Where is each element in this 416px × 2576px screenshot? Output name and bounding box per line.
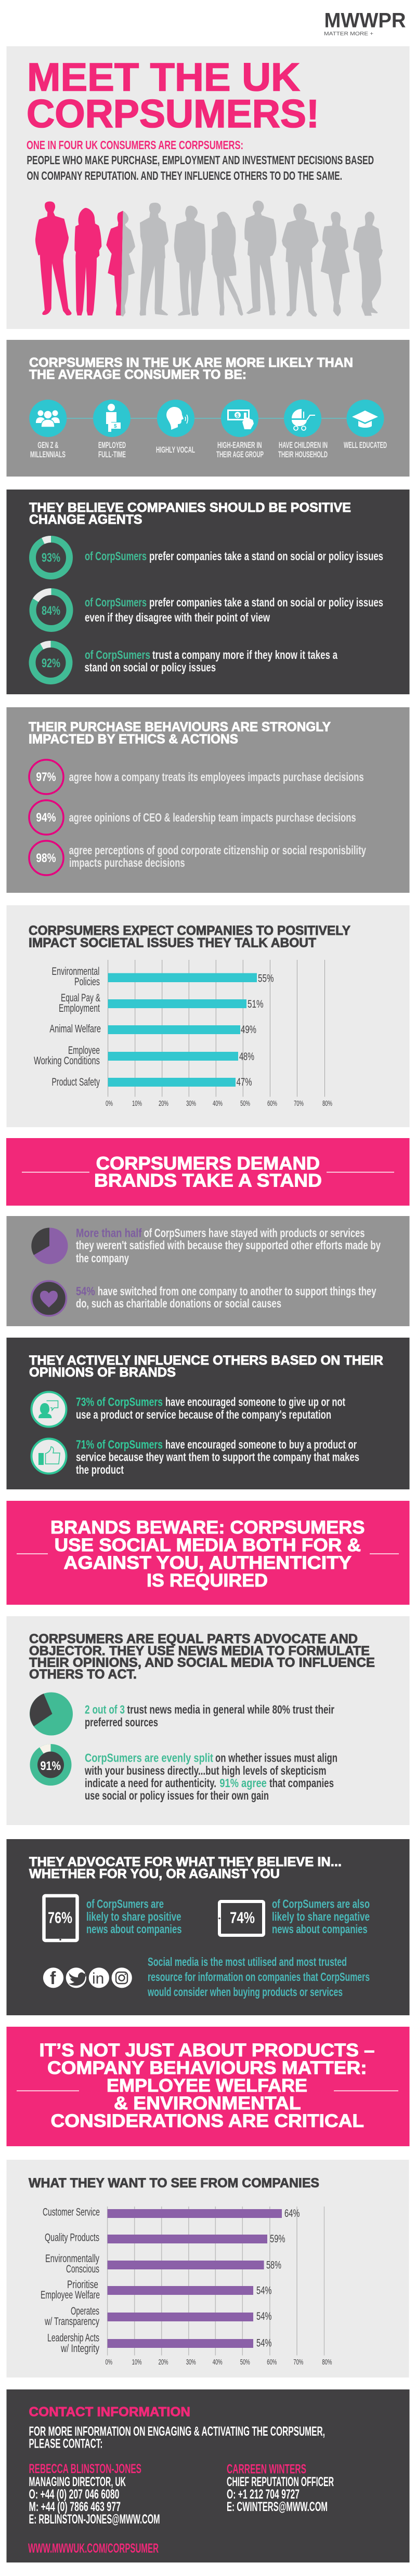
bar chart: company behaviours: Environmentally: [45, 2253, 99, 2265]
contact intro: PLEASE CONTACT:: [29, 2437, 103, 2451]
stat text: evenly split: CorpSumers are evenly split: [85, 1751, 213, 1765]
bar chart: issues: [34, 960, 332, 1108]
heading: CHANGE AGENTS: [29, 513, 142, 527]
stat text: 76%: of CorpSumers are: [86, 1897, 164, 1911]
banner: demand brands take a stand: BRANDS TAKE A STAND: [94, 1171, 322, 1191]
stat text: 74%: [272, 1897, 370, 1936]
panel: positive change agents: [6, 490, 410, 694]
bar chart: issues: 51%: [248, 998, 264, 1010]
bar chart: issues: Animal Welfare: [49, 1023, 101, 1035]
stat text: 92%: stand on social or policy issues: [84, 660, 216, 674]
stat text: 2 out of 3: [85, 1702, 334, 1729]
stat text: 74%: of CorpSumers are also: [272, 1897, 370, 1911]
hero intro text: [27, 138, 374, 182]
donut: 84%: 84%: [42, 604, 60, 618]
stat text: 76%: [86, 1897, 182, 1936]
banner: brands beware: AGAINST YOU, AUTHENTICITY: [63, 1553, 352, 1573]
banner: company behaviours matter: [6, 2027, 410, 2146]
icon labels: THEIR AGE GROUP: [216, 450, 264, 459]
donut: 91%: 91%: [41, 1759, 61, 1773]
bar chart: issues: 10%: [132, 1100, 142, 1108]
stat text: evenly split: use social or policy issues for their own gain: [85, 1789, 269, 1802]
bar chart: issues: Employment: [59, 1002, 100, 1014]
icon labels: GEN Z &: [37, 440, 58, 450]
stat text: 2 out of 3: trust news media in general while 80% trust their: [127, 1702, 334, 1716]
title: [27, 56, 319, 136]
stat text: 71%: [76, 1437, 359, 1476]
banner: demand brands take a stand: CORPSUMERS DEMAND: [96, 1154, 320, 1173]
heading: CORPSUMERS EXPECT COMPANIES TO POSITIVELY: [29, 924, 350, 938]
stat text: 76%: likely to share positive: [86, 1910, 181, 1923]
icon labels: HAVE CHILDREN IN: [279, 440, 328, 450]
stat text: 92%: [84, 648, 337, 674]
stat text: 73%: 73% of CorpSumers: [76, 1395, 163, 1408]
panel: advocate for what they believe: [6, 1839, 410, 2015]
stat text: 76%: news about companies: [86, 1922, 182, 1936]
icon labels: HIGH-EARNER IN: [217, 440, 262, 450]
banner: company behaviours matter: COMPANY BEHAVIOURS MATTER:: [47, 2058, 367, 2078]
heading: [29, 1354, 383, 1380]
icon: thumbs up: [31, 1438, 67, 1474]
icon labels: MILLENNIALS: [30, 450, 66, 459]
banner: company behaviours matter: IT’S NOT JUST ABOUT PRODUCTS –: [40, 2040, 374, 2060]
heading: THE AVERAGE CONSUMER TO BE:: [29, 368, 246, 382]
bar chart: company behaviours: 0%: [105, 2358, 112, 2367]
icon: landscape tablet 74%: [218, 1901, 264, 1935]
bar chart: issues: 47%: [237, 1076, 252, 1088]
icon: pram: [284, 400, 321, 437]
donut: 92%: 92%: [42, 656, 60, 670]
ring: 98%: [29, 841, 63, 875]
stat text: 73%: have encouraged someone to give up or not: [165, 1395, 345, 1408]
stat text: 74%: likely to share negative: [272, 1910, 370, 1923]
stat text: 54%: 54%: [76, 1285, 95, 1298]
banner: company behaviours matter: & ENVIRONMENTAL: [114, 2093, 301, 2113]
icon labels: HIGHLY VOCAL: [156, 445, 195, 455]
bar chart: company behaviours: [41, 2207, 332, 2367]
contact: Rebecca Blinston-Jones: [29, 2462, 160, 2527]
bar chart: issues: Employee: [68, 1045, 100, 1056]
heading: THEY ADVOCATE FOR WHAT THEY BELIEVE IN...: [29, 1855, 342, 1869]
icon: heart: [31, 1281, 67, 1316]
ring: 94%: [29, 800, 63, 835]
heading: [29, 1855, 342, 1881]
heading: THEIR OPINIONS, AND SOCIAL MEDIA TO INFLUENCE: [29, 1656, 375, 1670]
bar chart: company behaviours: Operates: [71, 2305, 99, 2317]
bar chart: issues: 49%: [241, 1024, 256, 1036]
heading: IMPACTED BY ETHICS & ACTIONS: [29, 733, 238, 746]
icon: portrait tablet 76%: [44, 1896, 77, 1940]
icons: social media: in: [92, 1970, 104, 1987]
stat text: 92%: trust a company more if they know it takes a: [152, 648, 337, 662]
heading: OTHERS TO ACT.: [29, 1668, 137, 1682]
heading: [29, 720, 331, 746]
logo: MWWPR: MATTER MORE +: [324, 31, 373, 37]
icons: social media: [43, 1967, 132, 1988]
panel: advocate and objector: [6, 1616, 410, 1825]
stat text: evenly split: that companies: [269, 1776, 334, 1790]
stat text: more than half: the company: [76, 1251, 129, 1265]
website: WWW.MWWUK.COM/CORPSUMER: [28, 2542, 159, 2556]
bar chart: company behaviours: Prioritise: [67, 2279, 98, 2291]
bar chart: issues: Product Safety: [52, 1076, 100, 1088]
heading: [29, 356, 353, 382]
panel: contact information: [6, 2389, 410, 2562]
stat text: evenly split: with your business directly...but high levels of skepticism: [84, 1764, 327, 1777]
icon labels: FULL-TIME: [98, 450, 126, 459]
bar chart: issues: Equal Pay &: [61, 992, 100, 1004]
stat text: 2 out of 3: 2 out of 3: [85, 1702, 125, 1716]
bar chart: company behaviours: Customer Service: [43, 2207, 100, 2218]
bar chart: issues: Policies: [74, 976, 100, 988]
contact: Rebecca Blinston-Jones: MANAGING DIRECTOR, UK: [29, 2475, 126, 2489]
banner: company behaviours matter: EMPLOYEE WELFARE: [107, 2076, 307, 2096]
icon labels: THEIR HOUSEHOLD: [278, 450, 328, 459]
icon: employed person with briefcase: [93, 400, 131, 437]
stat text: 71%: the product: [76, 1463, 124, 1476]
heading: CONTACT INFORMATION: [29, 2405, 190, 2420]
stat text: 84%: [85, 596, 383, 624]
stat text: 93%: of CorpSumers: [85, 549, 147, 563]
stat text: evenly split: indicate a need for authenticity.: [85, 1776, 216, 1790]
heading: [29, 1632, 375, 1682]
contact: Carreen Winters: O: +1 212 704 9727: [227, 2488, 300, 2502]
stat text: 71%: 71% of CorpSumers: [76, 1437, 163, 1451]
donut: 93%: [32, 539, 70, 576]
icon labels: [30, 440, 387, 459]
connector line: [67, 418, 347, 419]
bar chart: company behaviours: 80%: [322, 2358, 332, 2367]
bar chart: issues: 48%: [239, 1051, 254, 1063]
icon: speaking head: [157, 400, 194, 437]
banner: brands beware: USE SOCIAL MEDIA BOTH FOR &: [55, 1535, 361, 1555]
bar chart: company behaviours: w/ Transparency: [44, 2316, 99, 2328]
contact: Carreen Winters: E: CWINTERS@MWW.COM: [227, 2500, 328, 2514]
stat text: 54%: [76, 1285, 376, 1310]
stat text: 73%: [76, 1395, 345, 1421]
stat text: more than half: [76, 1226, 381, 1265]
logo: MWWPR: MWWPR: [324, 9, 406, 32]
bar chart: company behaviours: 50%: [240, 2358, 250, 2367]
contact: Rebecca Blinston-Jones: M: +44 (0) 7866 463 977: [29, 2500, 121, 2514]
title: CORPSUMERS!: [27, 92, 319, 136]
ring: 97%: [29, 760, 63, 794]
stat text: 98%: impacts purchase decisions: [69, 856, 185, 869]
panel: purchase behaviours: [6, 707, 410, 893]
bar chart: company behaviours: 54%: [256, 2284, 271, 2297]
bar chart: issues: 55%: [258, 973, 274, 985]
icon: woman with speech bubble: [31, 1392, 67, 1427]
heading: OBJECTOR. THEY USE NEWS MEDIA TO FORMULATE: [29, 1644, 370, 1658]
heading: OPINIONS OF BRANDS: [29, 1366, 176, 1380]
banner: demand brands take a stand: [6, 1138, 410, 1206]
panel: more likely to be: [6, 340, 410, 477]
bar chart: company behaviours: w/ Integrity: [60, 2343, 99, 2355]
stat text: 98%: [69, 843, 366, 869]
bar chart: issues: 20%: [159, 1100, 168, 1108]
bar chart: company behaviours: 64%: [284, 2208, 300, 2220]
stat text: 54%: do, such as charitable donations or social causes: [76, 1297, 281, 1310]
icon: landscape tablet 74%: 74%: [230, 1909, 255, 1927]
ring: 97%: 97%: [36, 770, 56, 784]
icon: mortarboard: [346, 400, 384, 437]
pie: 2 out of 3: [30, 1692, 73, 1736]
heading: THEY BELIEVE COMPANIES SHOULD BE POSITIVE: [29, 501, 351, 515]
bar chart: company behaviours: 58%: [266, 2260, 281, 2271]
ring: 94%: 94%: [36, 811, 56, 825]
bar chart: company behaviours: 20%: [159, 2358, 168, 2367]
stat text: evenly split: on whether issues must align: [215, 1751, 337, 1765]
bar chart: issues: 70%: [294, 1100, 304, 1108]
contact intro: [29, 2425, 325, 2451]
bar chart: issues: Environmental: [52, 966, 99, 977]
heading: [29, 501, 351, 527]
bar chart: company behaviours: 40%: [213, 2358, 223, 2367]
bar chart: company behaviours: 54%: [256, 2310, 271, 2322]
panel: hero: [6, 46, 410, 329]
banner: brands beware: [6, 1501, 410, 1605]
contact: Carreen Winters: CARREEN WINTERS: [227, 2462, 306, 2477]
stat text: evenly split: 91% agree: [219, 1776, 267, 1790]
heading: [29, 924, 350, 950]
donut: 84%: [33, 591, 70, 629]
bar chart: issues: 50%: [240, 1100, 250, 1108]
heading: THEIR PURCHASE BEHAVIOURS ARE STRONGLY: [29, 720, 331, 734]
donut: 92%: [32, 644, 69, 681]
bar chart: company behaviours: 54%: [256, 2337, 271, 2349]
heading: CORPSUMERS ARE EQUAL PARTS ADVOCATE AND: [29, 1632, 358, 1646]
stat text: more than half: More than half: [76, 1226, 142, 1240]
contact: Carreen Winters: CHIEF REPUTATION OFFICER: [227, 2475, 334, 2489]
hero intro text: ONE IN FOUR UK CONSUMERS ARE CORPSUMERS:: [27, 138, 243, 152]
bar chart: issues: 40%: [213, 1100, 223, 1108]
bar chart: company behaviours: Quality Products: [45, 2232, 99, 2244]
bar chart: issues: 30%: [186, 1100, 196, 1108]
bar chart: company behaviours: 59%: [270, 2233, 285, 2245]
icons: social media: f: [50, 1969, 56, 1988]
stat text: 2 out of 3: preferred sources: [85, 1715, 158, 1729]
icon: portrait tablet 76%: 76%: [48, 1909, 72, 1927]
bar chart: issues: 60%: [267, 1100, 277, 1108]
icon: money in hand: [221, 400, 258, 437]
bar chart: issues: Working Conditions: [34, 1055, 100, 1067]
bar chart: issues: 0%: [106, 1100, 113, 1108]
panel: loyalty and switching: [6, 1216, 410, 1326]
banner: company behaviours matter: CONSIDERATIONS ARE CRITICAL: [51, 2111, 364, 2131]
banner: brands beware: BRANDS BEWARE: CORPSUMERS: [50, 1517, 365, 1538]
icon: money in hand: $: [236, 413, 239, 419]
stat text: 84%: of CorpSumers: [85, 596, 147, 609]
banner: brands beware: IS REQUIRED: [147, 1570, 268, 1591]
bar chart: company behaviours: Conscious: [66, 2263, 99, 2275]
panel: societal issues chart: [6, 905, 410, 1127]
icon: group of people: [29, 400, 67, 437]
bar chart: company behaviours: 60%: [267, 2358, 277, 2367]
stat text: 84%: even if they disagree with their point of view: [85, 611, 270, 624]
ring: 98%: 98%: [36, 851, 56, 865]
bar chart: company behaviours: Leadership Acts: [47, 2332, 99, 2344]
contact: Rebecca Blinston-Jones: E: RBLINSTON-JONES@MWW.COM: [29, 2513, 160, 2527]
donut: 91%: [30, 1744, 72, 1786]
panel: influence others: [6, 1338, 410, 1489]
stat text: social media: [147, 1955, 370, 1999]
pie: more than half: [31, 1227, 68, 1264]
title: MEET THE UK: [27, 56, 300, 100]
panel: what they want chart: [6, 2160, 409, 2377]
heading: IMPACT SOCIETAL ISSUES THEY TALK ABOUT: [29, 936, 316, 950]
contact: Rebecca Blinston-Jones: REBECCA BLINSTON-JONES: [29, 2462, 141, 2476]
contact: Carreen Winters: [227, 2462, 334, 2514]
bar chart: issues: 80%: [322, 1100, 332, 1108]
heading: THEY ACTIVELY INFLUENCE OTHERS BASED ON THEIR: [29, 1354, 383, 1368]
contact: Rebecca Blinston-Jones: O: +44 (0) 207 046 6080: [29, 2488, 120, 2502]
bar chart: company behaviours: 30%: [186, 2358, 196, 2367]
icon labels: EMPLOYED: [98, 440, 126, 450]
heading: WHAT THEY WANT TO SEE FROM COMPANIES: [29, 2176, 319, 2190]
stat text: evenly split: [84, 1751, 337, 1802]
people silhouettes: one in four highlighted: [35, 201, 383, 317]
stat text: 74%: news about companies: [272, 1922, 368, 1936]
bar chart: company behaviours: Employee Welfare: [41, 2289, 100, 2301]
bar chart: company behaviours: 10%: [132, 2358, 142, 2367]
icon: employed person with briefcase: $: [114, 424, 117, 429]
stat text: 92%: of CorpSumers: [85, 648, 150, 662]
heading: WHETHER FOR YOU, OR AGAINST YOU: [29, 1867, 280, 1881]
heading: CORPSUMERS IN THE UK ARE MORE LIKELY THAN: [29, 356, 353, 370]
donut: 93%: 93%: [42, 551, 60, 565]
bar chart: company behaviours: 70%: [293, 2358, 303, 2367]
